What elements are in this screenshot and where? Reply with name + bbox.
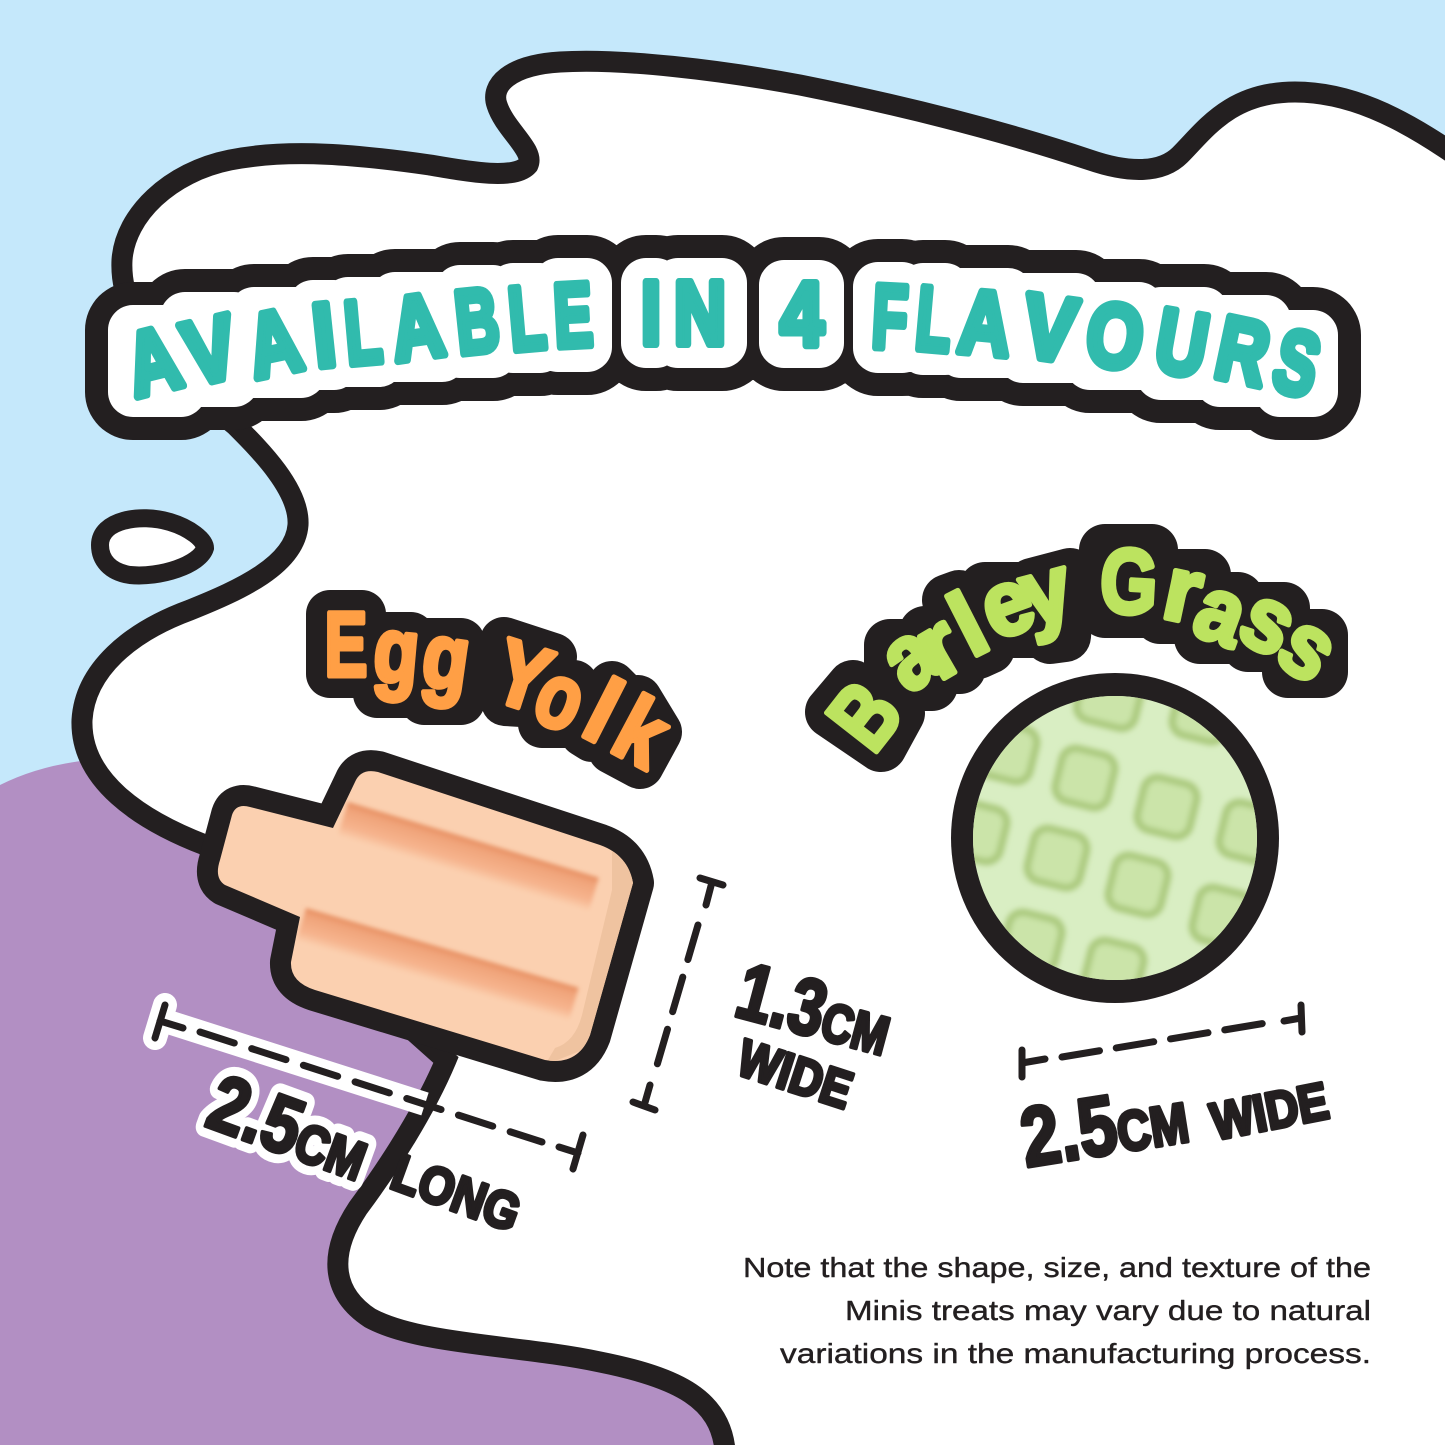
title: A: [116, 307, 191, 417]
dimension: egg yolk length: [155, 1005, 583, 1169]
title: I: [308, 283, 340, 386]
title: E: [551, 265, 595, 367]
title: I: [641, 263, 661, 364]
title: A: [955, 271, 1015, 376]
heading: Egg Yolk: Y: [482, 619, 564, 734]
title: A: [384, 274, 450, 381]
title: B: [451, 270, 504, 374]
note text: Note that the shape, size, and texture of the: [743, 1252, 1371, 1283]
heading: Egg Yolk: l: [569, 660, 637, 763]
title: A: [238, 289, 310, 398]
note text: [743, 1252, 1371, 1369]
title: U: [1148, 290, 1216, 398]
heading: Egg Yolk: g: [416, 602, 476, 711]
title: N: [674, 263, 726, 364]
title: F: [870, 267, 910, 369]
label: 2.5cm long: [197, 1057, 528, 1243]
droplet: [100, 518, 205, 575]
title: L: [912, 269, 956, 372]
label: 1.3cm wide: WIDE: [730, 1029, 859, 1120]
heading: Barley Grass: s: [1225, 564, 1315, 677]
heading: Egg Yolk: [325, 593, 686, 789]
heading: Barley Grass: r: [1155, 537, 1212, 644]
label: 2.5cm wide: [1014, 1066, 1333, 1185]
title: O: [1080, 283, 1150, 390]
label: 2.5cm long: 2.5CM: [197, 1057, 382, 1197]
egg yolk treat: [218, 771, 640, 1065]
dimension: egg yolk width: [633, 878, 723, 1110]
title: L: [341, 281, 386, 384]
heading: Egg Yolk: k: [598, 677, 686, 789]
title: V: [173, 295, 246, 405]
heading: Barley Grass: l: [934, 574, 1003, 676]
label: 2.5cm wide: 2.5CM: [1014, 1066, 1194, 1185]
label: 1.3cm wide: [727, 946, 901, 1120]
heading: Egg Yolk: E: [325, 593, 367, 696]
heading: Barley Grass: a: [1182, 555, 1262, 668]
heading: Barley Grass: G: [1098, 529, 1160, 634]
note text: variations in the manufacturing process.: [780, 1338, 1371, 1369]
heading: Barley Grass: e: [966, 547, 1047, 660]
note text: Minis treats may vary due to natural: [845, 1295, 1371, 1326]
label: 1.3cm wide: 1.3CM: [727, 946, 901, 1072]
heading: Barley Grass: a: [859, 601, 959, 711]
title: S: [1264, 310, 1329, 417]
title: 4: [780, 264, 824, 364]
dimension: barley grass width: [1022, 1005, 1302, 1077]
heading: Barley Grass: s: [1261, 591, 1358, 702]
title: L: [505, 267, 550, 370]
heading: Barley Grass: r: [897, 593, 980, 699]
title: V: [1017, 274, 1083, 381]
heading: Egg Yolk: o: [521, 641, 600, 753]
title: [116, 263, 1329, 417]
label: 2.5cm wide: WIDE: [1206, 1072, 1333, 1152]
heading: Barley Grass: B: [808, 663, 921, 768]
title: R: [1208, 298, 1278, 406]
barley grass treat: [944, 659, 1282, 1003]
heading: Barley Grass: y: [1009, 535, 1082, 647]
label: 2.5cm long: LONG: [384, 1144, 528, 1243]
purple corner shape: [0, 760, 800, 1445]
heading: Egg Yolk: g: [370, 598, 424, 704]
label: 2.5cm long: 2.5CM: [197, 1057, 382, 1197]
heading: Barley Grass: [808, 529, 1358, 768]
